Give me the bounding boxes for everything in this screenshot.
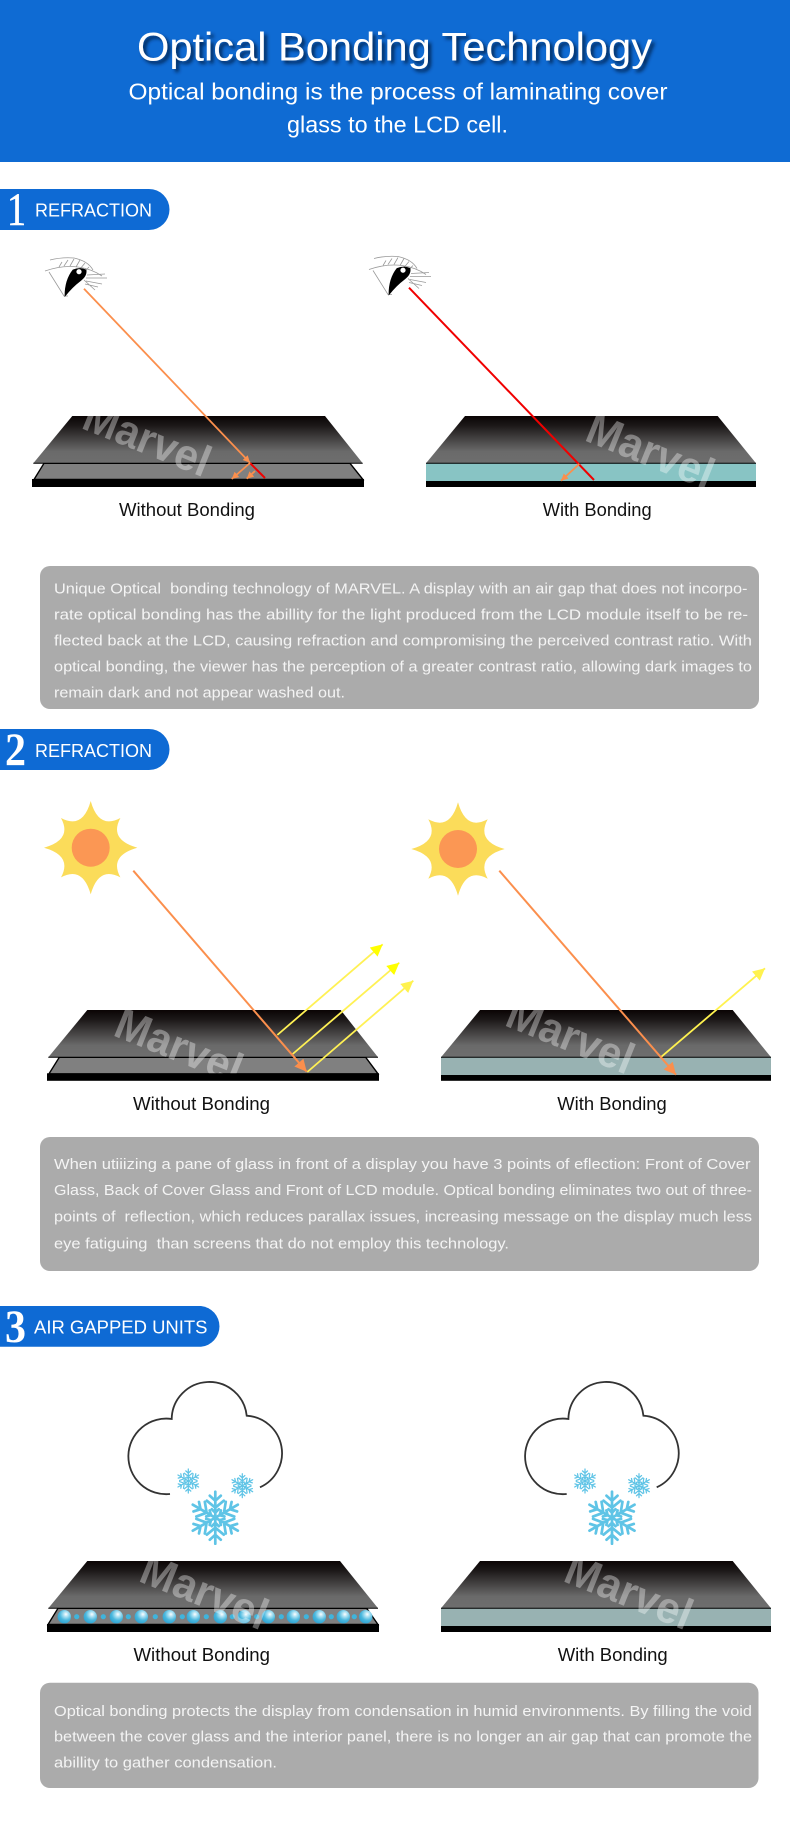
icon: sun xyxy=(44,801,137,894)
watermark: Marvel xyxy=(76,392,218,487)
watermark: Marvel xyxy=(108,999,250,1094)
text panel 1: rate optical bonding has the abillity for the light produced from the LCD module itself to be re- xyxy=(54,606,748,623)
panel: refraction without bonding xyxy=(32,258,364,520)
display layers xyxy=(47,1010,379,1081)
watermark: Marvel xyxy=(558,1545,700,1640)
watermark: Marvel xyxy=(134,1545,275,1640)
subtitle: glass to the LCD cell. xyxy=(287,112,508,138)
icon: eye xyxy=(45,258,107,296)
display layers xyxy=(47,1561,379,1632)
text panel 1: flected back at the LCD, causing refraction and compromising the perceived contrast ratio. With xyxy=(54,632,752,649)
icon: eye xyxy=(369,256,431,294)
condensation droplets xyxy=(58,1610,372,1623)
text panel 2: eye fatiguing than screens that do not employ this technology. xyxy=(54,1235,509,1252)
text panel 1 xyxy=(40,566,759,709)
label: With Bonding xyxy=(557,1093,667,1114)
panel: reflection with bonding xyxy=(411,802,771,1114)
display layers xyxy=(32,416,364,487)
light rays xyxy=(84,289,265,479)
text panel 1: Unique Optical bonding technology of MARVEL. A display with an air gap that does not incorpo- xyxy=(54,580,748,597)
text panel 3: abillity to gather condensation. xyxy=(54,1754,277,1771)
section 3 heading pill: 3 xyxy=(5,1301,26,1353)
text panel 2 xyxy=(40,1137,759,1271)
text panel 1: remain dark and not appear washed out. xyxy=(54,685,345,702)
label: Without Bonding xyxy=(133,1093,270,1114)
text panel 2: points of reflection, which reduces parallax issues, increasing message on the display much less xyxy=(54,1209,752,1226)
section 3 heading pill xyxy=(0,1301,219,1353)
text panel 3: between the cover glass and the interior panel, there is no longer an air gap that can promote the xyxy=(54,1729,752,1746)
section 3 heading pill: AIR GAPPED UNITS xyxy=(34,1316,208,1337)
watermark: Marvel xyxy=(500,989,641,1084)
light rays xyxy=(409,288,594,481)
text panel 1: optical bonding, the viewer has the perception of a greater contrast ratio, allowing dark images to xyxy=(54,658,752,676)
label: Without Bonding xyxy=(119,499,255,520)
icon: sun xyxy=(411,802,505,896)
label: With Bonding xyxy=(558,1644,668,1665)
subtitle: Optical bonding is the process of laminating cover xyxy=(128,78,668,104)
icon: snowflakes xyxy=(176,1469,255,1544)
watermark: Marvel xyxy=(580,404,721,499)
display layers xyxy=(441,1561,771,1632)
text panel 3 xyxy=(40,1683,758,1788)
icon: cloud xyxy=(128,1382,282,1494)
display layers xyxy=(441,1010,771,1081)
title: Optical Bonding Technology xyxy=(137,26,652,70)
section 2 heading pill: REFRACTION xyxy=(35,740,152,761)
section 1 heading pill xyxy=(0,184,170,236)
header banner xyxy=(0,0,790,162)
text panel 2: When utiiizing a pane of glass in front of a display you have 3 points of eflection: Front of Cover xyxy=(54,1156,750,1173)
light rays xyxy=(133,871,413,1072)
section 2 heading pill: 2 xyxy=(5,724,26,776)
light rays xyxy=(499,871,765,1075)
panel: condensation without bonding xyxy=(47,1382,379,1665)
icon: cloud xyxy=(525,1382,679,1494)
panel: condensation with bonding xyxy=(441,1382,771,1665)
display layers xyxy=(426,416,756,487)
label: Without Bonding xyxy=(134,1644,270,1665)
panel: reflection without bonding xyxy=(44,801,413,1114)
section 1 heading pill: 1 xyxy=(7,184,26,236)
icon: snowflakes xyxy=(573,1469,651,1544)
text panel 2: Glass, Back of Cover Glass and Front of LCD module. Optical bonding eliminates two out of three- xyxy=(54,1182,752,1199)
section 2 heading pill xyxy=(0,724,170,776)
panel: refraction with bonding xyxy=(369,256,756,520)
section 1 heading pill: REFRACTION xyxy=(35,200,152,221)
subtitle xyxy=(128,78,668,138)
label: With Bonding xyxy=(543,499,652,520)
text panel 3: Optical bonding protects the display from condensation in humid environments. By filling the void xyxy=(54,1703,752,1720)
